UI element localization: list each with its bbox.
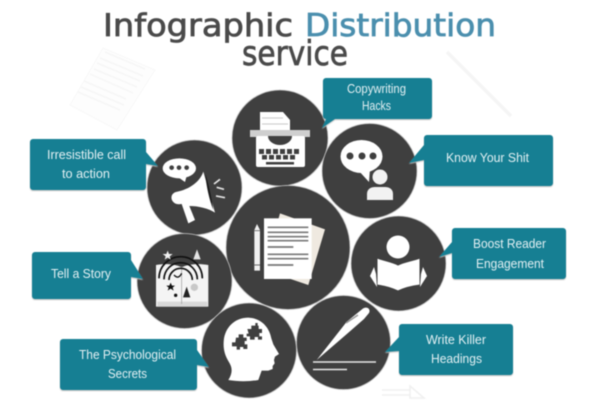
callout: Write Killer Headings: Write Killer [426, 332, 487, 347]
callout: Write Killer Headings: Headings [431, 351, 482, 366]
icon: open storybook [156, 249, 208, 307]
circle: megaphone [147, 140, 242, 235]
callout: Boost Reader Engagement: Boost Reader [473, 236, 547, 251]
callout: Boost Reader Engagement [439, 228, 566, 279]
callout: Copywriting Hacks: Hacks [362, 98, 391, 113]
icon: typewriter [250, 112, 310, 167]
icon: head with puzzle pieces [224, 318, 279, 381]
callout: The Psychological Secrets: Secrets [108, 366, 147, 381]
icon: person reading [370, 236, 427, 291]
star above [163, 251, 173, 260]
icon: papers and pencil [254, 213, 325, 285]
title line 1 dark: Infographic [103, 8, 293, 44]
icon: speech bubble with person [340, 140, 393, 200]
callout: The Psychological Secrets [60, 339, 209, 390]
callout: Write Killer Headings [385, 324, 513, 375]
callout: Copywriting Hacks [322, 78, 432, 128]
circle: central documents [226, 186, 350, 310]
callout: Tell a Story: Tell a Story [51, 266, 111, 281]
icon: pen writing lines [313, 308, 376, 370]
circle: pen [296, 296, 390, 390]
callout: Irresistible call to action [30, 139, 158, 190]
callout: Boost Reader Engagement: Engagement [476, 256, 544, 271]
small star [166, 283, 175, 291]
callout: Tell a Story [32, 252, 143, 299]
callout: Know Your Shit: Know Your Shit [446, 150, 529, 165]
faded arrow decoration [382, 386, 424, 398]
circle: storybook [137, 234, 232, 328]
faded pen decoration [447, 52, 511, 116]
callout: Copywriting Hacks: Copywriting [347, 81, 406, 96]
title line 2: service [242, 34, 348, 74]
faded paper decoration [70, 48, 155, 130]
circle: head with puzzle [202, 303, 296, 398]
title [103, 8, 496, 74]
circle: typewriter [232, 90, 328, 186]
circle: speech and person [322, 124, 417, 218]
icon: megaphone with speech bubble [163, 158, 225, 223]
circle: reader [351, 216, 446, 311]
callout: Irresistible call to action: to action [62, 166, 110, 181]
callout: Know Your Shit [409, 135, 553, 186]
title line 1 blue: Distribution [305, 8, 496, 44]
callout: The Psychological Secrets: The Psychological [79, 347, 176, 362]
callout: Irresistible call to action: Irresistible call [47, 147, 126, 162]
tree above [193, 249, 201, 259]
